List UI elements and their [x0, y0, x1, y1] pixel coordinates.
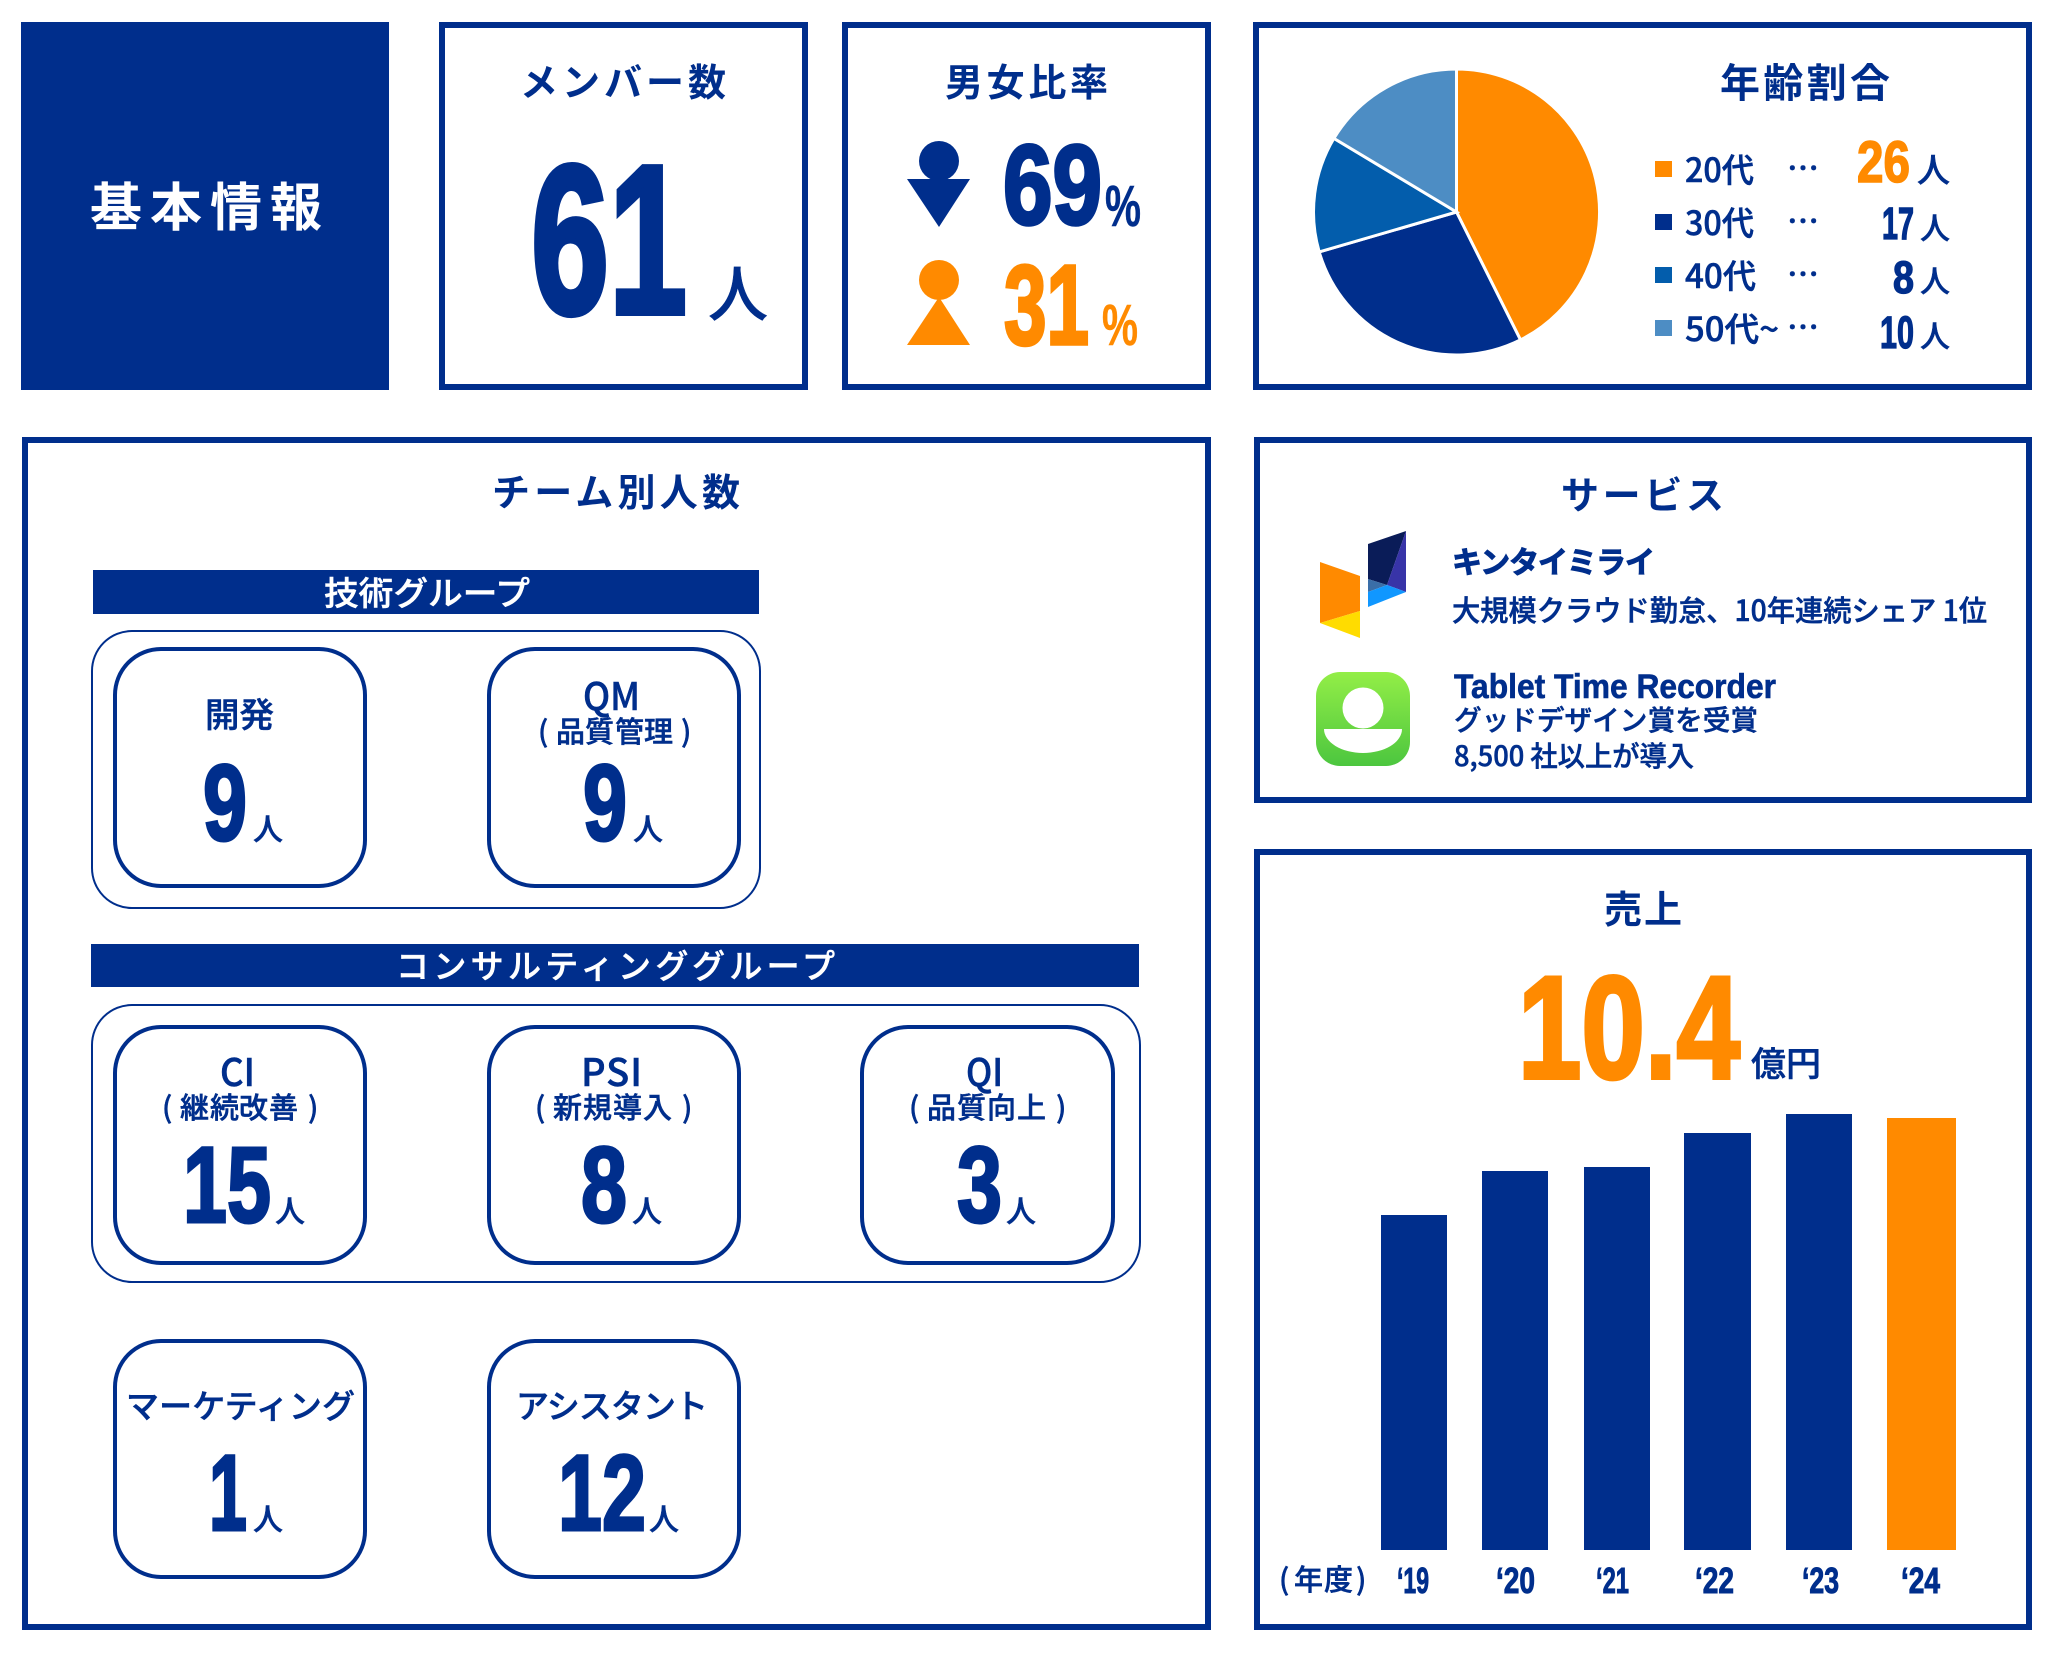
legend: 40s: 人 — [1920, 257, 1950, 301]
legend: 40s: 40代 — [1685, 250, 1756, 298]
number: female 31 percent: 31 — [1004, 242, 1089, 368]
card: development: 開発 — [205, 688, 274, 737]
card: CI: 人 — [275, 1187, 305, 1231]
card: QM: 9 — [583, 742, 627, 863]
axis labels: fiscal years: (年度) — [1279, 1557, 1366, 1599]
card: PSI: (新規導入) — [535, 1085, 692, 1127]
legend: 30s: … — [1787, 197, 1819, 243]
text: Kintai Mirai: キンタイミライ — [1452, 538, 1655, 582]
legend: 30s: 人 — [1920, 204, 1950, 248]
card: assistant — [489, 1341, 739, 1577]
card: QM — [489, 649, 739, 886]
group header: consulting — [91, 940, 1139, 988]
axis labels: fiscal years: ‘21 — [1596, 1560, 1629, 1601]
legend: 30s: 17 — [1882, 198, 1914, 249]
number: sales total: 億円 — [1751, 1037, 1821, 1086]
card: QI: 人 — [1006, 1187, 1036, 1231]
card: QM: QM — [583, 666, 640, 721]
legend: 50s and over: 10 — [1880, 307, 1914, 358]
card: assistant: 人 — [649, 1495, 679, 1539]
card: PSI: 人 — [632, 1187, 662, 1231]
panel: sales — [1257, 852, 2029, 1627]
card: development: 人 — [253, 805, 283, 849]
card: assistant: アシスタント — [516, 1380, 708, 1428]
number: male 69 percent: 69 — [1003, 122, 1102, 248]
group header: engineering — [93, 567, 759, 615]
legend: 30s: 30代 — [1685, 197, 1754, 245]
text: Tablet Time Recorder: Tablet Time Recorder — [1454, 668, 1776, 706]
legend: 30s — [1655, 197, 1950, 249]
group header: engineering: 技術グループ — [324, 567, 530, 615]
pie chart: age split — [1314, 69, 1600, 355]
card: QI: QI — [966, 1042, 1003, 1097]
number: sales total: 10.4 — [1518, 946, 1740, 1109]
text: Tablet Time Recorder: 8,500 社以上が導入 — [1454, 735, 1694, 775]
number: male 69 percent: % — [1105, 174, 1141, 239]
panel: basic info title block — [21, 22, 389, 390]
legend: 20s: 26 — [1857, 130, 1910, 195]
heading: gender ratio: 男女比率 — [945, 52, 1108, 107]
legend: 20s: … — [1787, 144, 1819, 190]
heading: sales: 売上 — [1604, 879, 1682, 934]
text: Tablet Time Recorder — [1454, 668, 1776, 775]
card: CI: CI — [220, 1042, 255, 1097]
text: Kintai Mirai — [1452, 538, 1987, 630]
heading: services: サービス — [1561, 465, 1724, 520]
icon: female — [907, 260, 970, 345]
number: 61 members: 61 — [531, 121, 687, 358]
card: marketing — [115, 1341, 365, 1577]
panel: basic info title block: 基本情報 — [90, 166, 322, 241]
card: PSI: 8 — [581, 1124, 627, 1245]
legend: 40s — [1655, 250, 1950, 303]
legend: 20s — [1655, 130, 1950, 195]
card: QM: (品質管理) — [538, 709, 691, 751]
legend: 50s and over: 50代~ — [1685, 303, 1779, 351]
legend: 50s and over: … — [1787, 303, 1819, 349]
card: QI — [862, 1027, 1113, 1263]
legend: 50s and over — [1655, 303, 1950, 358]
heading: member count: メンバー数 — [520, 52, 726, 107]
card: marketing: 1 — [209, 1432, 247, 1553]
axis labels: fiscal years — [1279, 1557, 1940, 1601]
number: female 31 percent: % — [1102, 293, 1138, 358]
axis labels: fiscal years: ‘19 — [1397, 1560, 1429, 1601]
card: QM: 人 — [633, 805, 663, 849]
card: PSI — [489, 1027, 739, 1263]
icon: Kintai Mirai logo — [1320, 531, 1406, 638]
card: marketing: 人 — [253, 1495, 283, 1539]
panel: gender ratio — [845, 25, 1208, 387]
legend: 50s and over: 人 — [1920, 312, 1950, 356]
group frame: engineering — [92, 631, 760, 908]
card: CI: 15 — [183, 1124, 271, 1245]
heading: headcount by team: チーム別人数 — [492, 462, 740, 517]
panel: age distribution — [1256, 25, 2029, 387]
card: QI: (品質向上) — [909, 1085, 1066, 1127]
card: CI — [115, 1027, 365, 1263]
card: assistant: 12 — [558, 1432, 646, 1553]
icon: male — [907, 141, 970, 227]
text: Kintai Mirai: 大規模クラウド勤怠、10年連続シェア 1位 — [1452, 588, 1987, 630]
text: Tablet Time Recorder: グッドデザイン賞を受賞 — [1454, 699, 1758, 739]
heading: age ratio: 年齢割合 — [1720, 51, 1890, 109]
group frame: consulting — [92, 1005, 1140, 1282]
legend: 40s: 8 — [1893, 252, 1914, 303]
card: development — [115, 649, 365, 886]
bar chart: annual sales — [1381, 1114, 1956, 1550]
axis labels: fiscal years: ‘20 — [1496, 1560, 1535, 1601]
unit: people: 人 — [708, 247, 768, 334]
card: CI: (継続改善) — [162, 1085, 318, 1127]
card: PSI: PSI — [581, 1042, 642, 1097]
legend: 20s: 人 — [1917, 144, 1950, 192]
panel: headcount by team — [25, 440, 1208, 1627]
icon: Tablet Time Recorder app — [1316, 672, 1410, 766]
card: QI: 3 — [957, 1124, 1002, 1245]
panel: services — [1257, 440, 2029, 800]
legend: 40s: … — [1787, 250, 1819, 296]
legend: 20s: 20代 — [1685, 144, 1754, 192]
card: development: 9 — [203, 742, 247, 863]
card: marketing: マーケティング — [126, 1380, 355, 1428]
group header: consulting: コンサルティンググループ — [396, 940, 835, 988]
axis labels: fiscal years: ‘24 — [1901, 1560, 1940, 1601]
panel: member count — [442, 25, 805, 387]
axis labels: fiscal years: ‘23 — [1802, 1560, 1839, 1601]
axis labels: fiscal years: ‘22 — [1695, 1560, 1734, 1601]
